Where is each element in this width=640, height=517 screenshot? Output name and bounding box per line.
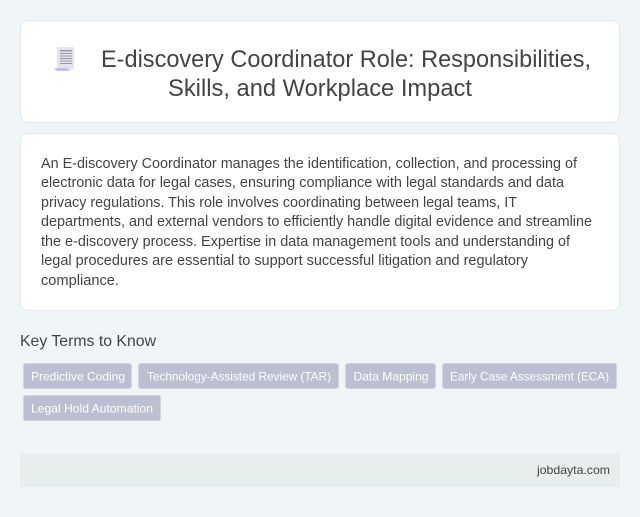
tag: early case assessment: Early Case Assessment (ECA): [450, 370, 609, 384]
text block: role description: the e-discovery process. Expertise in data management tools and understanding of: [41, 234, 571, 250]
tag: predictive coding: Predictive Coding: [31, 370, 125, 384]
text block: role description: An E-discovery Coordinator manages the identification, collection, and processing of: [41, 156, 578, 172]
tag: legal hold automation: [23, 395, 161, 421]
text block: role description: electronic data for legal cases, ensuring compliance with legal standards and data: [41, 175, 564, 191]
text block: role description: privacy regulations. This role involves coordinating between legal teams, IT: [41, 195, 517, 211]
text block: role description: legal procedures are essential to support successful litigation and regulatory: [41, 253, 529, 269]
tag: predictive coding: [23, 363, 132, 389]
tag: data mapping: [345, 363, 436, 389]
title: Skills, and Workplace Impact: [168, 75, 472, 102]
panel: title card: [20, 20, 620, 123]
icon: document scroll: [55, 47, 74, 71]
text block: role description: departments, and external vendors to efficiently handle digital evidence and streamline: [41, 214, 592, 230]
text block: role description: [41, 156, 592, 289]
tag: early case assessment: [442, 363, 617, 389]
title: [101, 46, 591, 102]
heading: key terms: Key Terms to Know: [20, 333, 156, 350]
panel: description card: [20, 133, 620, 311]
tag: technology-assisted review: Technology-Assisted Review (TAR): [147, 370, 331, 384]
title: E-discovery Coordinator Role: Responsibilities,: [101, 46, 591, 73]
tag: technology-assisted review: [138, 363, 339, 389]
text block: role description: compliance.: [41, 273, 119, 289]
tag: legal hold automation: Legal Hold Automation: [31, 402, 153, 416]
tag: data mapping: Data Mapping: [354, 370, 428, 384]
footer text: site name: jobdayta.com: [536, 463, 610, 477]
footer bar: [20, 453, 620, 487]
